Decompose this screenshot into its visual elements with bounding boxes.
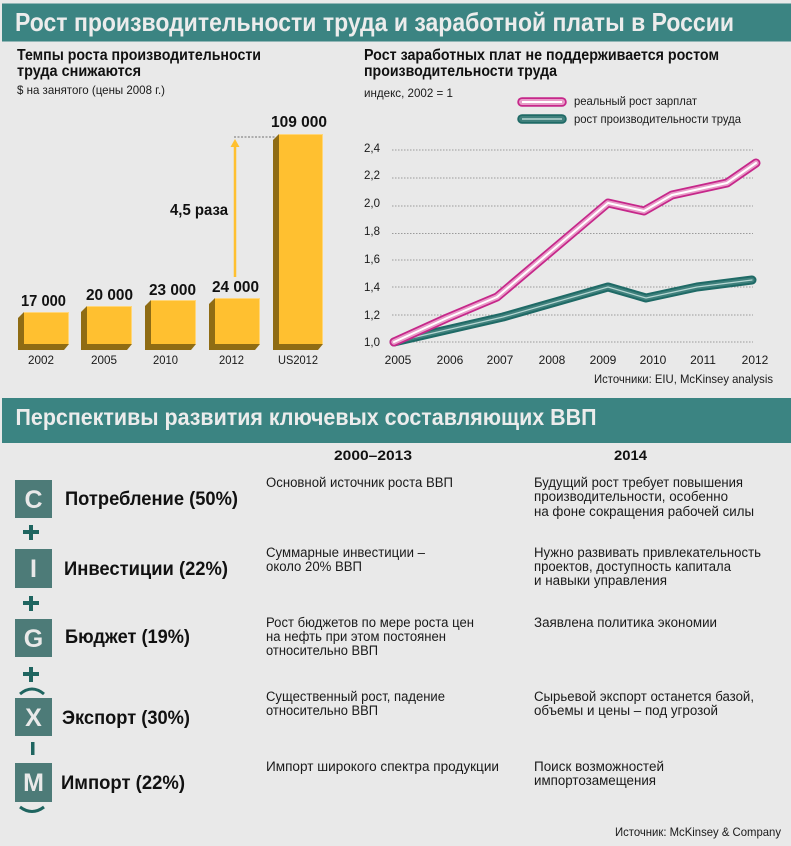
bar 2010: 2010	[153, 353, 178, 367]
y axis labels: 1,4	[364, 280, 380, 294]
y axis labels: 1,8	[364, 224, 380, 238]
component: budget: G	[24, 625, 43, 653]
text: export 2000-2013	[266, 689, 445, 718]
arrow: 4.5 times gap	[170, 137, 275, 277]
arrow: 4.5 times gap: 4,5 раза	[170, 202, 228, 219]
closing bracket	[20, 807, 44, 812]
text: investment 2000-2013: около 20% ВВП	[266, 559, 362, 574]
heading: wage growth: Рост заработных плат не поддерживается ростом	[364, 47, 719, 64]
component: export	[15, 698, 190, 736]
component: budget	[15, 619, 190, 657]
column headings	[334, 447, 647, 463]
text: investment 2014	[534, 545, 761, 588]
y axis labels: 2,2	[364, 168, 380, 182]
x axis labels: 2007	[487, 353, 514, 367]
plus sign	[23, 667, 39, 682]
text: investment 2000-2013: Суммарные инвестиции –	[266, 545, 425, 560]
component: consumption: C	[24, 486, 43, 514]
text: consumption 2014	[534, 475, 754, 519]
text: consumption 2014: Будущий рост требует повышения	[534, 475, 743, 490]
plus sign	[23, 525, 39, 540]
x axis labels	[385, 353, 769, 367]
section banner	[2, 398, 791, 443]
heading: productivity growth: труда снижаются	[17, 63, 141, 80]
opening bracket	[20, 689, 44, 694]
legend: wages: реальный рост зарплат	[574, 94, 697, 108]
bar 2010: 23 000	[149, 282, 196, 299]
text: budget 2014: Заявлена политика экономии	[534, 615, 717, 630]
x axis labels: 2005	[385, 353, 412, 367]
column headings: 2000–2013	[334, 447, 412, 463]
source: charts: Источники: EIU, McKinsey analysis	[594, 372, 773, 386]
bar 2012: 24 000	[212, 279, 259, 296]
text: import 2014: Поиск возможностей	[534, 759, 664, 774]
bar chart: output per employee	[18, 114, 327, 367]
x axis labels: 2012	[742, 353, 769, 367]
component: investment	[15, 549, 228, 588]
text: import 2014: импортозамещения	[534, 773, 656, 788]
line: productivity	[394, 280, 752, 342]
bar 2005	[81, 287, 133, 367]
text: export 2000-2013: Существенный рост, падение	[266, 689, 445, 704]
y axis labels: 1,6	[364, 252, 380, 266]
column headings: 2014	[614, 447, 647, 463]
text: export 2014: Сырьевой экспорт останется базой,	[534, 689, 754, 704]
text: consumption 2000-2013: Основной источник роста ВВП	[266, 475, 453, 490]
legend: productivity: рост производительности труда	[574, 112, 741, 126]
x axis labels: 2008	[539, 353, 566, 367]
text: import 2000-2013: Импорт широкого спектра продукции	[266, 759, 499, 774]
section banner: Перспективы развития ключевых составляющих ВВП	[16, 404, 596, 430]
heading: wage growth: производительности труда	[364, 63, 557, 80]
text: consumption 2014: на фоне сокращения рабочей силы	[534, 504, 754, 519]
component: consumption	[15, 480, 238, 518]
GDP formula column	[15, 480, 238, 812]
x axis labels: 2006	[437, 353, 464, 367]
component: export: X	[25, 704, 42, 732]
text: export 2014	[534, 689, 754, 718]
text: consumption 2014: производительности, особенно	[534, 489, 728, 504]
text: investment 2000-2013	[266, 545, 425, 574]
text: export 2000-2013: относительно ВВП	[266, 703, 378, 718]
line chart: wages vs productivity	[364, 141, 769, 367]
unit note: line chart: индекс, 2002 = 1	[364, 86, 453, 100]
bar US2012	[271, 114, 327, 367]
component: import: M	[23, 769, 44, 797]
legend	[522, 94, 741, 126]
component: import: Импорт (22%)	[61, 773, 185, 794]
component: investment: Инвестиции (22%)	[64, 559, 228, 580]
text: investment 2014: и навыки управления	[534, 573, 667, 588]
y axis labels: 1,2	[364, 308, 380, 322]
bar US2012: 109 000	[271, 114, 327, 131]
text: export 2014: объемы и цены – под угрозой	[534, 703, 718, 718]
text: investment 2014: Нужно развивать привлекательность	[534, 545, 761, 560]
bar 2005: 20 000	[86, 287, 133, 304]
bar 2010	[145, 282, 196, 367]
plus sign	[23, 596, 39, 611]
y axis labels: 1,0	[364, 335, 380, 349]
x axis labels: 2009	[590, 353, 617, 367]
text: budget 2000-2013	[266, 615, 474, 658]
bar 2012: 2012	[219, 353, 244, 367]
bar 2012	[209, 279, 260, 367]
text: import 2014	[534, 759, 664, 788]
unit note: bar chart: $ на занятого (цены 2008 г.)	[17, 83, 165, 97]
source: table: Источник: McKinsey & Company	[615, 825, 781, 839]
y axis labels: 2,4	[364, 141, 380, 155]
y axis labels: 2,0	[364, 196, 380, 210]
y axis labels	[364, 141, 380, 349]
component: export: Экспорт (30%)	[62, 708, 190, 729]
component: budget: Бюджет (19%)	[65, 627, 190, 648]
bar 2002: 17 000	[21, 293, 66, 310]
heading: productivity growth: Темпы роста производительности	[17, 47, 261, 64]
heading: productivity growth	[17, 47, 261, 80]
bar 2005: 2005	[91, 353, 117, 367]
line: wages	[394, 163, 756, 342]
text: budget 2000-2013: на нефть при этом постоянен	[266, 629, 446, 644]
component: import	[15, 763, 185, 802]
bar US2012: US2012	[278, 353, 318, 367]
component: consumption: Потребление (50%)	[65, 489, 238, 510]
heading: wage growth	[364, 47, 719, 80]
x axis labels: 2011	[690, 353, 716, 367]
bar 2002: 2002	[28, 353, 54, 367]
text: budget 2000-2013: Рост бюджетов по мере роста цен	[266, 615, 474, 630]
minus sign	[31, 742, 34, 755]
text: investment 2014: проектов, доступность капитала	[534, 559, 731, 574]
x axis labels: 2010	[640, 353, 667, 367]
component: investment: I	[30, 555, 37, 583]
bar 2002	[18, 293, 69, 367]
text: budget 2000-2013: относительно ВВП	[266, 643, 378, 658]
